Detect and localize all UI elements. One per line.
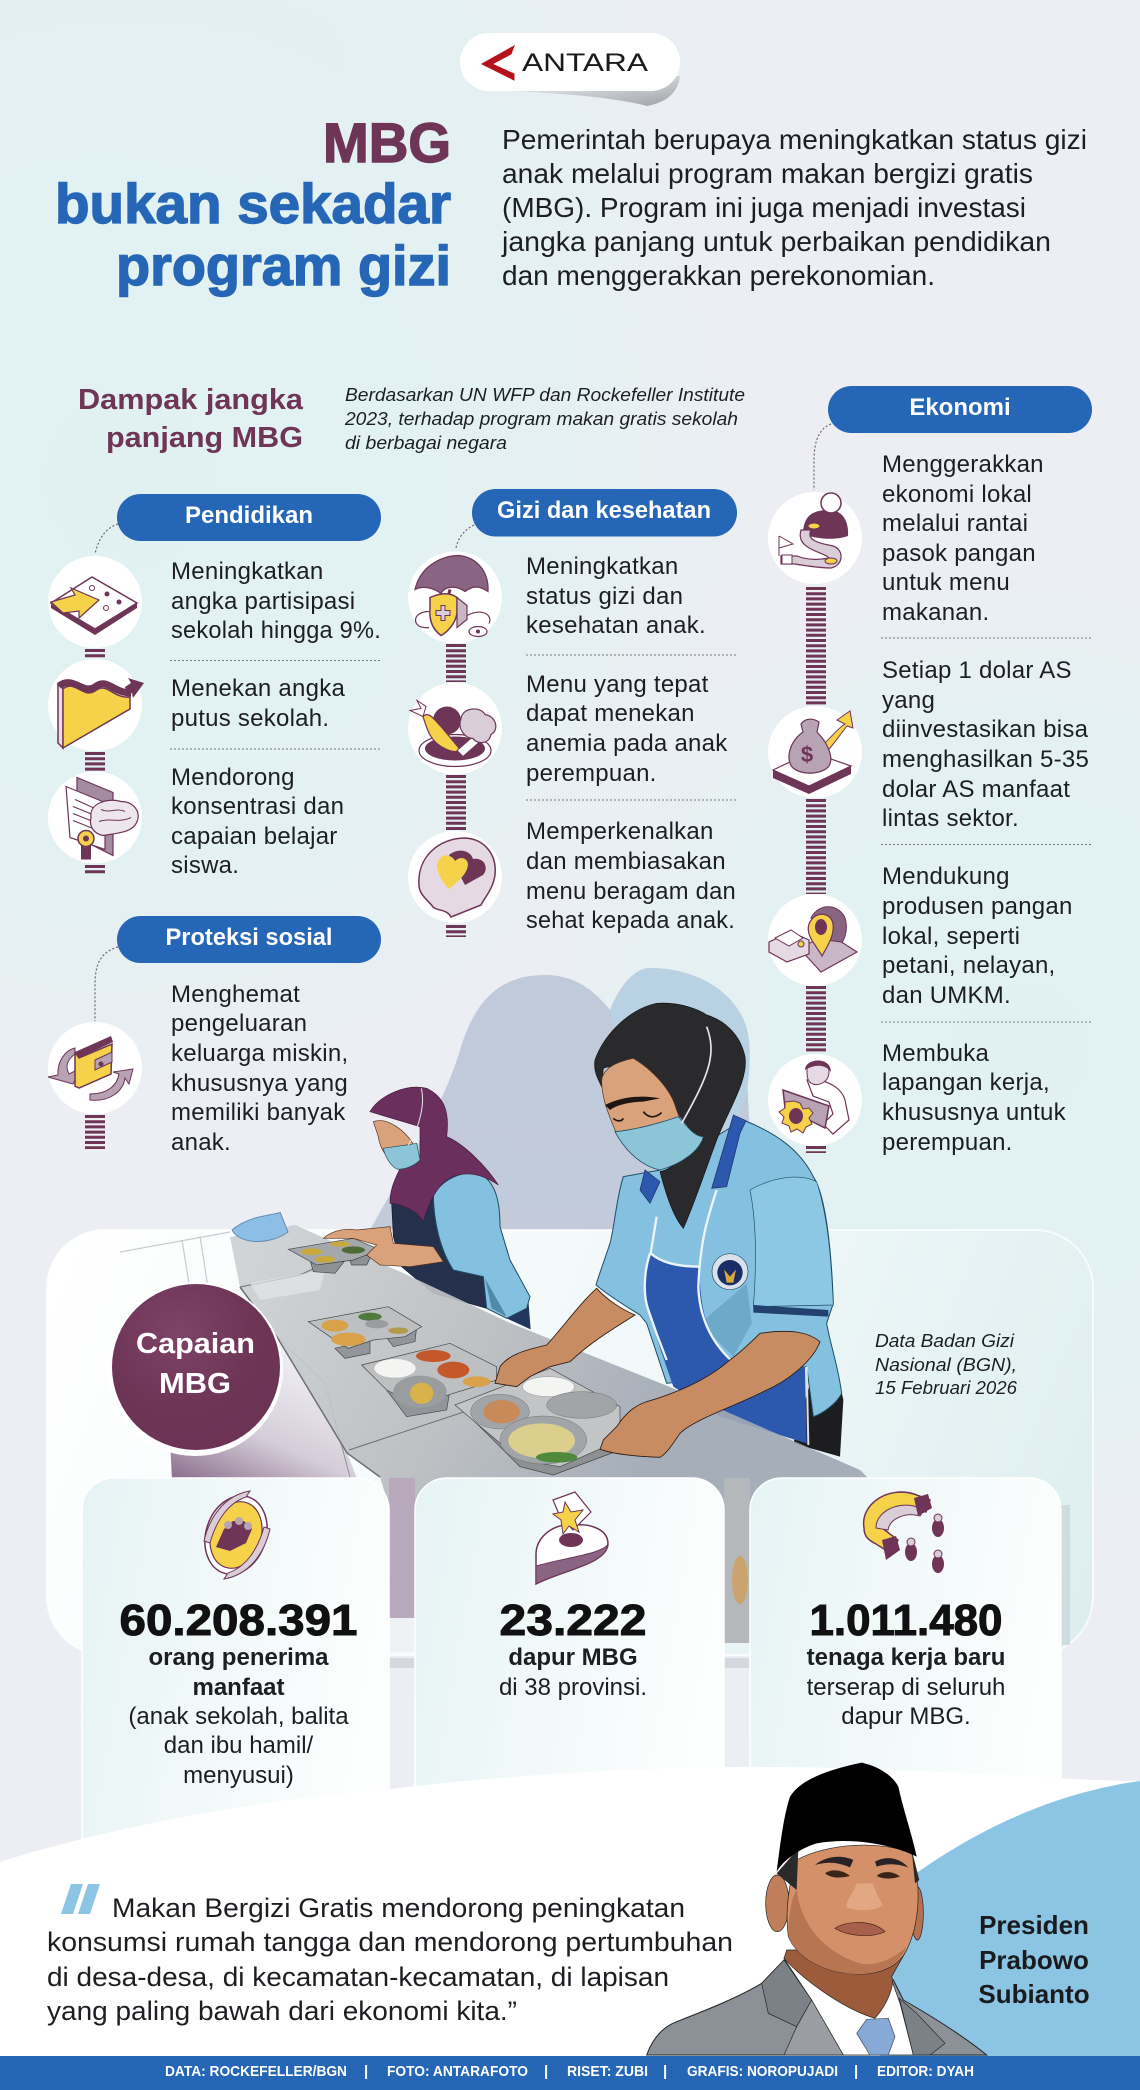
point: konsentrasi: siswa. [171,852,239,879]
card: dapur MBG: di 38 provinsi. [499,1674,647,1701]
point: menu beragam: menu beragam dan [526,878,736,905]
tray 2 [308,1307,422,1358]
illustration: President Prabowo [647,1763,987,2055]
card: tenaga kerja: tenaga kerja baru [807,1644,1005,1671]
icon: umbrella and shield [408,552,502,644]
point: status gizi: Meningkatkan [526,553,678,580]
point: partisipasi sekolah: angka partisipasi [171,588,355,615]
card: dapur MBG: dapur MBG [508,1644,638,1671]
point: lapangan kerja: Membuka [882,1040,990,1067]
point: lapangan kerja: perempuan. [882,1129,1013,1156]
footer credits: FOTO: ANTARAFOTO [387,2063,528,2080]
card: penerima manfaat: dan ibu hamil/ [164,1732,314,1759]
icon: money bag and arrow [768,706,862,798]
panel: Ekonomi [768,386,1093,1156]
point: rantai pasok: Menggerakkan [882,451,1044,478]
point: anemia [526,671,728,787]
footer credits: RISET: ZUBI [567,2063,648,2080]
heading pill: Gizi dan kesehatan: Gizi dan kesehatan [497,497,711,524]
panel: Gizi dan kesehatan [408,489,737,934]
source note: di berbagai negara [345,432,507,453]
icon: worker with gear [768,1054,862,1146]
point: partisipasi sekolah: sekolah hingga 9%. [171,617,381,644]
intro paragraph [501,124,1087,291]
point: menghemat pengeluaran: pengeluaran [171,1010,307,1037]
point: produsen lokal: dan UMKM. [882,982,1011,1009]
point: putus sekolah: putus sekolah. [171,705,329,732]
quote text: konsumsi rumah tangga dan mendorong pertumbuhan [47,1927,733,1957]
card: tenaga kerja: 1.011.480 [810,1596,1002,1645]
heading pill: Ekonomi: Ekonomi [909,394,1011,421]
source note: Berdasarkan UN WFP dan Rockefeller Institute [345,384,745,405]
point: lapangan kerja: khususnya untuk [882,1099,1067,1126]
gaps between stat cards [389,1478,1070,1668]
footer credits: DATA: ROCKEFELLER/BGN [165,2063,347,2080]
point: status gizi [526,553,706,639]
icon: wallet with arrows [48,1022,142,1114]
point: partisipasi sekolah [171,558,381,644]
heading pill: Proteksi sosial: Proteksi sosial [166,924,332,951]
card: penerima manfaat: manfaat [192,1674,285,1701]
footer credits [0,2056,1140,2090]
heading pill: Pendidikan [117,494,381,541]
point: menghemat pengeluaran: khususnya yang [171,1070,348,1097]
icon: vegetable plate [408,682,502,774]
point: rantai pasok [882,451,1044,626]
intro paragraph: (MBG). Program ini juga menjadi investasi [502,192,1026,223]
point: manfaat lintas sektor: lintas sektor. [882,805,1019,832]
icon: magnet attracting people [864,1492,944,1573]
point: menghemat pengeluaran: keluarga miskin, [171,1040,348,1067]
source note [344,384,745,453]
point: putus sekolah: Menekan angka [171,675,345,702]
point: konsentrasi: konsentrasi dan [171,793,344,820]
card: penerima manfaat: menyusui) [183,1762,294,1789]
footer credits: | [544,2063,548,2080]
point: menu beragam: Memperkenalkan [526,818,714,845]
point: status gizi: kesehatan anak. [526,612,706,639]
point: produsen lokal: petani, nelayan, [882,952,1055,979]
point: putus sekolah [171,675,345,732]
intro paragraph: anak melalui program makan bergizi gratis [502,158,1033,189]
point: manfaat lintas sektor: menghasilkan 5-35 [882,746,1089,773]
point: rantai pasok: makanan. [882,599,989,626]
heading pill: Pendidikan: Pendidikan [185,502,313,529]
quote text: yang paling bawah dari ekonomi kita.” [47,1996,517,2026]
tray 3 [362,1343,497,1417]
point: rantai pasok: ekonomi lokal [882,481,1032,508]
point: menu beragam [526,818,736,934]
section heading: Dampak jangka panjang MBG: Dampak jangka [78,384,304,416]
point: konsentrasi: Mendorong [171,764,295,791]
point: manfaat lintas sektor: dolar AS manfaat [882,776,1070,803]
point: manfaat lintas sektor: Setiap 1 dolar AS [882,657,1072,684]
card: penerima manfaat: (anak sekolah, balita [128,1703,349,1730]
badge: Capaian MBG: MBG [159,1368,231,1400]
intro paragraph: Pemerintah berupaya meningkatkan status gizi [502,124,1087,155]
quote text [47,1893,733,2026]
panel: Capaian MBG background [47,1230,1093,1655]
point: konsentrasi [171,764,344,879]
point: anemia: Menu yang tepat [526,671,709,698]
ANTARA logo [460,33,680,106]
point: lapangan kerja: lapangan kerja, [882,1069,1050,1096]
data source note: 15 Februari 2026 [875,1377,1018,1398]
data source note: Nasional (BGN), [875,1354,1017,1375]
point: manfaat lintas sektor: yang [882,687,935,714]
point: status gizi: status gizi dan [526,583,683,610]
source note: 2023, terhadap program makan gratis sekolah [344,408,738,429]
icon: money bag and arrow: $ [801,742,813,767]
white quote section [0,1767,1140,2056]
point: menghemat pengeluaran [171,981,348,1156]
ANTARA logo: ANTARA [522,49,648,77]
point: menghemat pengeluaran: memiliki banyak [171,1099,346,1126]
point: rantai pasok: untuk menu [882,569,1010,596]
section heading: Dampak jangka panjang MBG: panjang MBG [106,422,303,454]
heading pill: Gizi dan kesehatan [472,489,737,536]
point: produsen lokal: lokal, seperti [882,923,1020,950]
data source note [875,1330,1018,1398]
point: menu beragam: sehat kepada anak. [526,907,735,934]
heading pill: Proteksi sosial [117,916,381,963]
quote text: di desa-desa, di kecamatan-kecamatan, di lapisan [47,1962,669,1992]
decorative stripes and connectors [95,424,831,1153]
tray 1 [288,1238,377,1273]
card: dapur MBG: 23.222 [500,1596,646,1645]
counter surface [120,1212,880,1640]
card: penerima manfaat: orang penerima [148,1644,329,1671]
icon: dropping chart [48,659,144,751]
point: menghemat pengeluaran: Menghemat [171,981,300,1008]
card: tenaga kerja [750,1478,1061,1908]
label: Presiden Prabowo Subianto: Subianto [978,1979,1090,2009]
title: program gizi [116,234,451,297]
worker in black hijab [595,1003,843,1457]
icon: person and supply road [768,492,862,584]
badge: Capaian MBG: Capaian [136,1328,255,1360]
title [55,111,451,297]
point: anemia: dapat menekan [526,700,695,727]
point: menu beragam: dan membiasakan [526,848,726,875]
tray 4 [455,1368,620,1475]
card: penerima manfaat [82,1478,389,1908]
illustration: counter with workers and trays [120,1003,880,1640]
meal trays [288,1238,620,1475]
icon: certificate and brain [48,772,142,864]
icon: people in cycle [195,1488,277,1582]
footer credits: GRAFIS: NOROPUJADI [687,2063,838,2080]
point: anemia: perempuan. [526,760,657,787]
point: produsen lokal [882,863,1073,1009]
worker hands and arms [323,1227,820,1457]
card: dapur MBG [415,1478,724,1908]
point: anemia: anemia pada anak [526,730,728,757]
card: penerima manfaat: 60.208.391 [120,1596,358,1645]
background heart shape [370,968,755,1230]
icon: head with heart [408,831,502,923]
title: bukan sekadar [55,172,451,235]
card: tenaga kerja: dapur MBG. [841,1703,971,1730]
footer credits: | [663,2063,667,2080]
title: MBG [323,111,451,174]
point: rantai pasok: pasok pangan [882,540,1036,567]
section heading: Dampak jangka panjang MBG [78,384,304,454]
card: tenaga kerja: terserap di seluruh [807,1674,1005,1701]
point: manfaat lintas sektor: diinvestasikan bisa [882,716,1089,743]
point: produsen lokal: produsen pangan [882,893,1073,920]
intro paragraph: dan menggerakkan perekonomian. [502,260,935,291]
footer credits: | [364,2063,368,2080]
icon: map pin and shop [768,894,862,986]
label: Presiden Prabowo Subianto: Prabowo [979,1945,1089,1975]
quote text: Makan Bergizi Gratis mendorong peningkatan [112,1893,685,1923]
point: menghemat pengeluaran: anak. [171,1129,231,1156]
icon: board with arrow [48,556,142,648]
label: Presiden Prabowo Subianto: Presiden [979,1910,1089,1940]
point: manfaat lintas sektor [882,657,1089,832]
blue shape behind president [880,1781,1140,2056]
label: Presiden Prabowo Subianto [978,1910,1090,2009]
worker in purple hijab [370,1087,531,1329]
footer credits: EDITOR: DYAH [877,2063,974,2080]
quote mark [61,1884,100,1914]
point: lapangan kerja [882,1040,1067,1156]
data source note: Data Badan Gizi [875,1330,1015,1351]
heading pill: Ekonomi [828,386,1092,433]
point: partisipasi sekolah: Meningkatkan [171,558,323,585]
footer credits: | [854,2063,858,2080]
badge: Capaian MBG [107,1282,283,1456]
icon: location pin with star [536,1492,608,1584]
point: konsentrasi: capaian belajar [171,823,338,850]
point: rantai pasok: melalui rantai [882,510,1028,537]
panel: Proteksi sosial [48,916,381,1156]
point: produsen lokal: Mendukung [882,863,1010,890]
panel: Pendidikan [48,494,381,879]
intro paragraph: jangka panjang untuk perbaikan pendidikan [501,226,1051,257]
